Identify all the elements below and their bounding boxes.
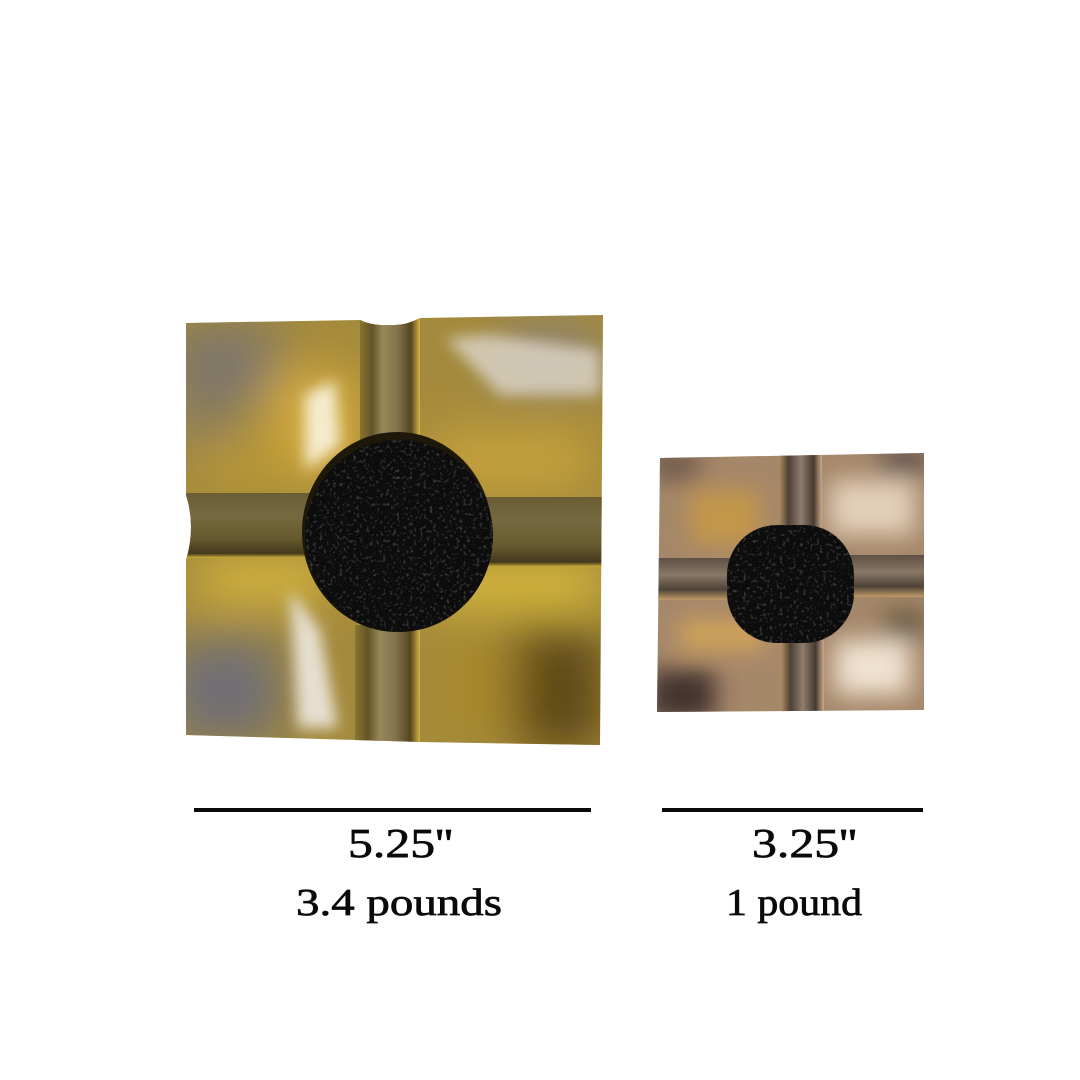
label: large weight: 3.4 pounds — [296, 882, 502, 924]
hole: small ashtray — [727, 525, 854, 643]
dimension line: large — [194, 808, 591, 812]
icon: large ashtray — [170, 310, 610, 750]
icon: small ashtray — [650, 450, 930, 720]
label: small weight: 1 pound — [726, 882, 862, 924]
quadrant glow: small ashtray — [650, 450, 930, 720]
highlights: large ashtray — [290, 335, 600, 728]
label: large width: 5.25'' — [348, 820, 453, 866]
label: small width: 3.25'' — [752, 820, 857, 866]
infographic: ashtray size comparison — [186, 315, 924, 924]
grooves: small ashtray — [657, 455, 925, 713]
hole: large ashtray — [302, 432, 493, 632]
dimension line: small — [662, 808, 923, 812]
quadrant glow: large ashtray — [170, 325, 605, 750]
grooves: large ashtray — [186, 318, 603, 745]
